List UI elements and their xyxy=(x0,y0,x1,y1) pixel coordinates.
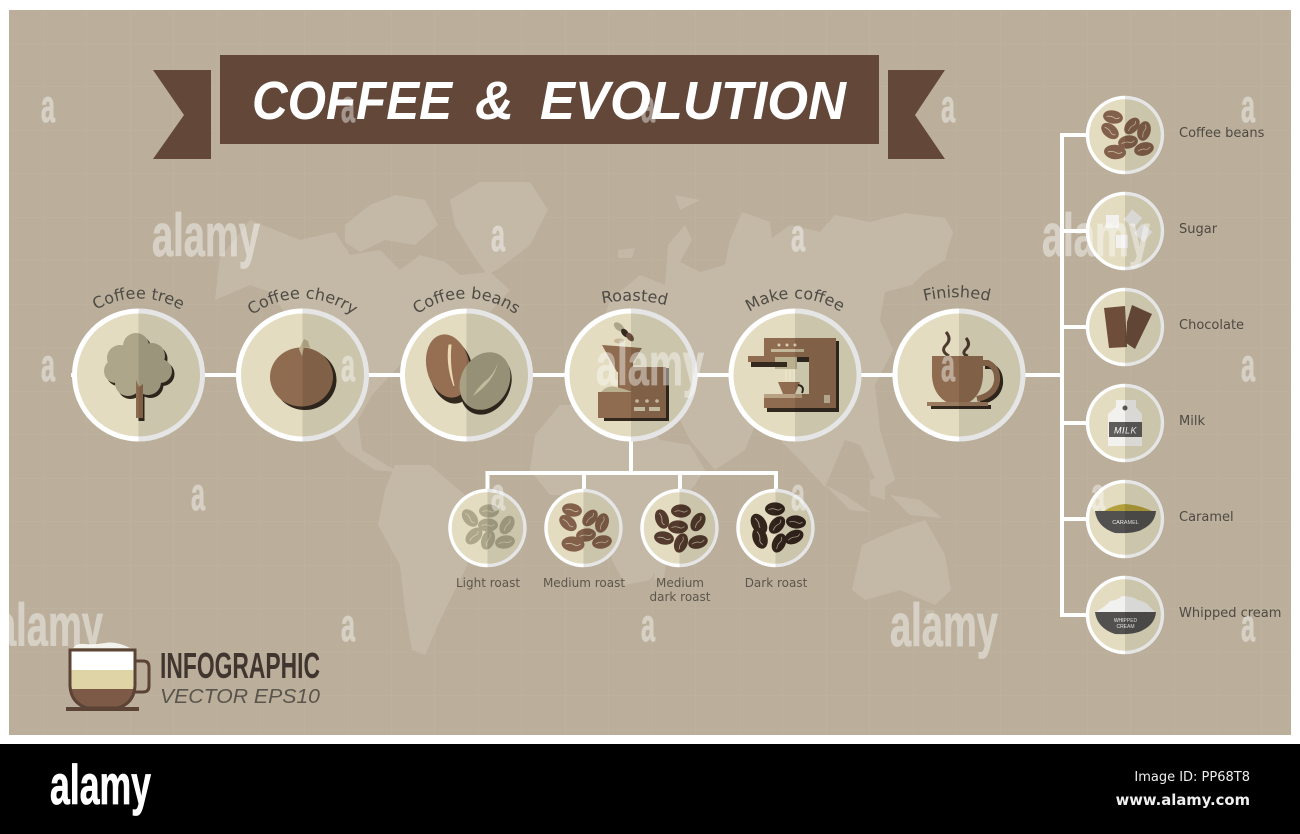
watermarks: alamy xyxy=(0,592,103,659)
label: Coffee beans xyxy=(414,286,520,313)
watermarks: a xyxy=(791,209,805,261)
watermarks: a xyxy=(191,468,205,520)
icon: whipped cream bowl: WHIPPED xyxy=(1114,618,1138,624)
icon: medium beans xyxy=(556,502,613,553)
icon: tree xyxy=(104,333,174,421)
image id: Image ID: PP68T8 xyxy=(1134,770,1250,785)
icon: espresso machine xyxy=(748,338,839,412)
roast: dark xyxy=(738,488,815,590)
roast: light xyxy=(450,488,527,590)
watermarks: a xyxy=(491,468,505,520)
label: Make coffee xyxy=(745,289,844,311)
icon: chocolate bars xyxy=(1104,305,1152,349)
watermarks: a xyxy=(41,80,55,132)
world map xyxy=(215,182,953,655)
icon: dark beans xyxy=(747,502,807,555)
connector lines xyxy=(71,135,1087,615)
watermarks: alamy xyxy=(1042,202,1150,269)
label: Milk xyxy=(1179,414,1205,429)
watermarks: a xyxy=(1241,599,1255,651)
label: dark roast xyxy=(650,590,711,604)
icon: two beans xyxy=(420,330,522,424)
watermarks: a xyxy=(41,339,55,391)
watermarks: a xyxy=(941,339,955,391)
icon: light beans xyxy=(459,504,518,552)
title: & xyxy=(475,71,514,131)
ingredient: coffee beans xyxy=(1088,96,1265,174)
icon: whipped cream bowl: CREAM xyxy=(1116,624,1135,630)
title: EVOLUTION xyxy=(540,71,847,131)
label: Coffee tree xyxy=(93,287,183,309)
icon: sugar cubes xyxy=(1106,210,1152,248)
logo text xyxy=(160,645,320,708)
watermarks: a xyxy=(341,599,355,651)
label: Roasted xyxy=(602,290,668,305)
step: coffee beans xyxy=(400,286,533,442)
ingredient: sugar xyxy=(1088,192,1218,270)
watermarks: a xyxy=(791,468,805,520)
step: coffee tree xyxy=(72,287,205,442)
banner panel xyxy=(220,55,879,144)
watermarks: a xyxy=(1241,339,1255,391)
watermarks: a xyxy=(491,209,505,261)
icon: caramel bowl: CARAMEL xyxy=(1112,520,1139,526)
label: Sugar xyxy=(1179,222,1218,237)
ingredient: caramel xyxy=(1088,480,1234,558)
footer bar xyxy=(0,744,1300,834)
roast: medium xyxy=(543,488,625,590)
watermarks: alamy xyxy=(152,202,260,269)
title: COFFEE xyxy=(252,71,454,131)
logo text: INFOGRAPHIC xyxy=(160,645,320,686)
icon: beans xyxy=(1098,109,1155,160)
watermarks: a xyxy=(341,80,355,132)
label: Light roast xyxy=(456,576,520,590)
ribbon right xyxy=(888,70,945,159)
label: Coffee beans xyxy=(1179,126,1265,141)
watermarks: a xyxy=(941,80,955,132)
roast: medium dark xyxy=(642,488,719,604)
footer logo: alamy xyxy=(50,753,151,816)
step: make coffee xyxy=(728,289,862,442)
watermarks: a xyxy=(641,599,655,651)
icon: cherry xyxy=(270,339,336,410)
icon: milk carton: MILK xyxy=(1114,426,1137,436)
logo: layered coffee cup xyxy=(66,643,149,711)
watermarks: alamy xyxy=(890,592,998,659)
website: www.alamy.com xyxy=(1116,792,1250,809)
watermarks: a xyxy=(341,339,355,391)
ingredient: milk xyxy=(1088,384,1205,462)
step: finished xyxy=(892,285,1026,442)
icon: medium dark beans xyxy=(652,504,709,555)
step: roasted xyxy=(564,290,698,442)
ingredient: chocolate xyxy=(1088,288,1244,366)
icon: roaster xyxy=(598,320,669,421)
label: Coffee cherry xyxy=(248,288,358,314)
watermarks xyxy=(0,80,1255,659)
label: Caramel xyxy=(1179,510,1234,525)
ribbon left xyxy=(153,70,211,159)
watermarks: a xyxy=(1241,80,1255,132)
icon: coffee cup xyxy=(927,332,1000,409)
logo text: VECTOR EPS10 xyxy=(160,686,320,708)
label: Medium roast xyxy=(543,576,625,590)
icon: caramel bowl xyxy=(1095,504,1156,533)
label: Medium xyxy=(656,576,704,590)
label: Dark roast xyxy=(745,576,808,590)
ingredient: whipped cream xyxy=(1088,576,1281,654)
label: Whipped cream xyxy=(1179,606,1281,621)
watermarks: a xyxy=(1091,468,1105,520)
watermarks: alamy xyxy=(596,331,704,398)
icon: whipped cream bowl xyxy=(1095,596,1156,634)
watermarks: a xyxy=(641,80,655,132)
label: Chocolate xyxy=(1179,318,1244,333)
step: coffee cherry xyxy=(236,288,369,442)
label: Finished xyxy=(924,285,990,301)
title banner xyxy=(153,55,945,159)
